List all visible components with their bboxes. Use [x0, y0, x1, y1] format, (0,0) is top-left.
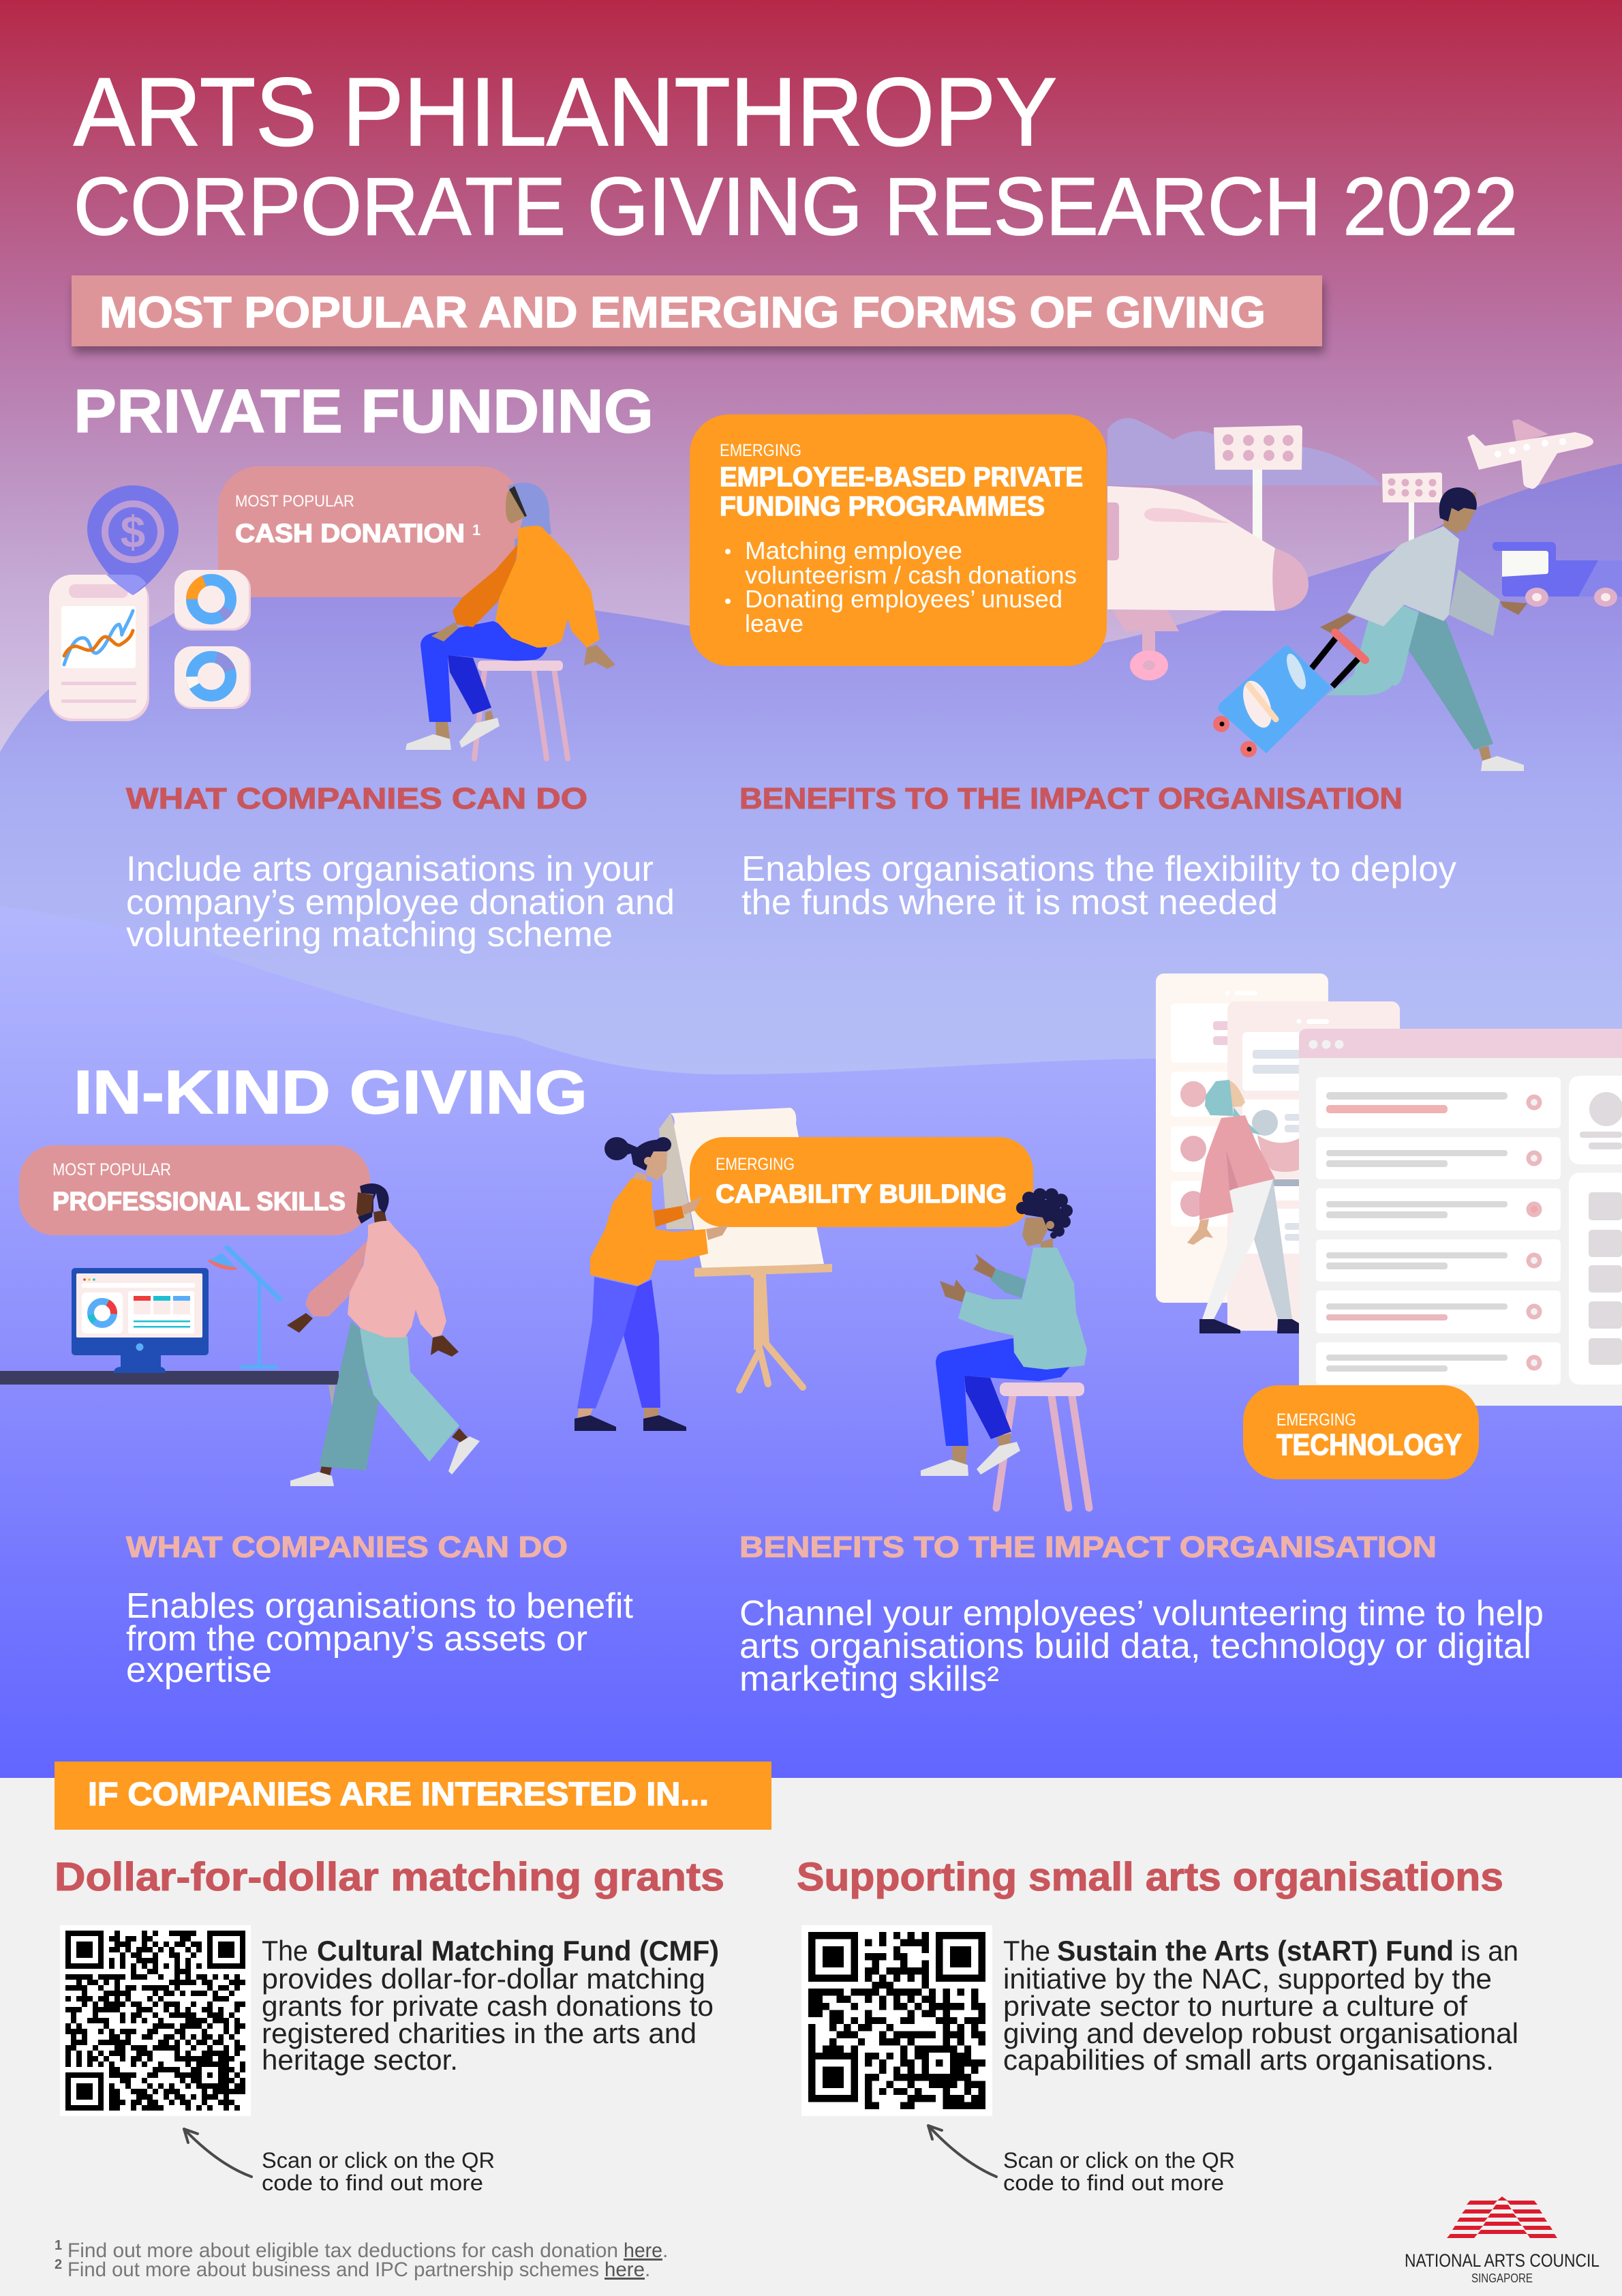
note: scan left	[262, 2148, 495, 2195]
orange box: employee-based programmes: Donating employees’ unused	[745, 585, 1062, 613]
pill: technology: TECHNOLOGY	[1276, 1428, 1462, 1462]
logo: national arts council: SINGAPORE	[1471, 2271, 1533, 2285]
section two columns: what companies can do	[126, 1530, 634, 1690]
note: scan left: code to find out more	[262, 2171, 483, 2195]
section two columns: benefits: BENEFITS TO THE IMPACT ORGANISATION	[739, 1530, 1437, 1564]
text: sustain the arts fund: The	[1003, 1935, 1050, 1967]
orange box: employee-based programmes: Matching employee	[745, 537, 962, 564]
illustration: back app screen	[1156, 973, 1328, 1303]
note: scan right	[1003, 2148, 1235, 2195]
illustration: woman looking at screens	[1187, 1080, 1299, 1333]
logo: national arts council	[1405, 2196, 1600, 2285]
section one columns: what companies can do: Include arts organisations in your	[126, 849, 654, 889]
section two columns: what companies can do: WHAT COMPANIES CAN DO	[126, 1530, 568, 1564]
section one columns: benefits: the funds where it is most needed	[741, 883, 1278, 922]
footnotes: Find out more about business and IPC partnership schemes	[67, 2259, 599, 2281]
icon: donut tile one	[174, 570, 251, 631]
footnotes: 2	[55, 2257, 62, 2272]
airport backdrop: cloud and signs	[1107, 418, 1442, 547]
section two columns: benefits: marketing skills²	[739, 1659, 999, 1699]
section one columns: what companies can do	[126, 782, 675, 954]
banner: most popular and emerging	[72, 275, 1322, 346]
illustration: man seated with curly hair	[921, 1188, 1089, 1508]
pill: cash donation: MOST POPULAR	[235, 492, 354, 511]
text: sustain the arts fund: giving and develop robust organisational	[1003, 2017, 1518, 2049]
illustration: desk with monitor and lamp	[0, 1246, 339, 1385]
text: sustain the arts fund: is an	[1460, 1935, 1518, 1967]
pill: professional skills: MOST POPULAR	[52, 1160, 171, 1179]
pill: cash donation: 1	[472, 522, 480, 539]
illustration: woman seated on stool	[406, 483, 615, 759]
title: CORPORATE GIVING RESEARCH 2022	[74, 161, 1518, 252]
note: scan left: Scan or click on the QR	[262, 2148, 495, 2173]
footnotes: here	[624, 2239, 662, 2262]
text: sustain the arts fund	[1003, 1935, 1518, 2076]
orange box: employee-based programmes: leave	[745, 609, 804, 637]
section two columns: benefits: arts organisations build data, technology or digital	[739, 1627, 1531, 1666]
section one columns: what companies can do: company’s employee donation and	[126, 883, 675, 922]
QR code: sustain the arts fund	[801, 1925, 992, 2116]
arrow: to left QR code	[184, 2129, 251, 2177]
section one columns: what companies can do: WHAT COMPANIES CAN DO	[126, 782, 587, 815]
heading: supporting small arts organisations: Supporting small arts organisations	[797, 1855, 1503, 1899]
illustration: woman presenting	[575, 1137, 729, 1431]
pill: professional skills: PROFESSIONAL SKILLS	[52, 1188, 346, 1216]
footnotes	[55, 2238, 668, 2281]
pill: capability building: EMERGING	[716, 1155, 795, 1174]
icon: phone with chart and location pin	[49, 485, 179, 721]
pill: professional skills	[19, 1145, 370, 1235]
plane on the ground	[1107, 486, 1309, 680]
section two columns: benefits: Channel your employees’ volunteering time to help	[739, 1594, 1544, 1633]
section one columns: benefits: Enables organisations the flexibility to deploy	[741, 849, 1456, 889]
pill: cash donation: CASH DONATION	[235, 519, 465, 548]
illustration: flip chart easel	[659, 1108, 832, 1390]
text: sustain the arts fund: capabilities of small arts organisations.	[1003, 2044, 1494, 2076]
icon: phone with chart and location pin: $	[121, 507, 145, 557]
text: cultural matching fund: registered charities in the arts and	[262, 2017, 697, 2049]
pill: technology: EMERGING	[1276, 1410, 1356, 1430]
footnotes: .	[645, 2259, 650, 2281]
orange box: employee-based programmes: EMPLOYEE-BASED PRIVATE	[720, 462, 1083, 492]
orange box: employee-based programmes: FUNDING PROGRAMMES	[720, 492, 1045, 522]
text: cultural matching fund	[262, 1935, 719, 2076]
orange box: employee-based programmes: volunteerism / cash donations	[745, 561, 1077, 589]
section two columns: what companies can do: expertise	[126, 1650, 272, 1690]
icon: donut tile two	[174, 646, 251, 709]
heading: dollar-for-dollar matching grants: Dollar-for-dollar matching grants	[55, 1855, 724, 1899]
title: ARTS PHILANTHROPY	[74, 58, 1057, 166]
footnotes: Find out more about eligible tax deductions for cash donation	[67, 2239, 618, 2262]
title	[74, 58, 1518, 252]
text: cultural matching fund: provides dollar-for-dollar matching	[262, 1963, 705, 1995]
arrow: to right QR code	[928, 2126, 996, 2177]
text: cultural matching fund: Cultural Matching Fund (CMF)	[317, 1935, 719, 1967]
pill: capability building: CAPABILITY BUILDING	[716, 1180, 1007, 1209]
illustration: man with suitcase	[1213, 487, 1527, 771]
pill: technology	[1243, 1385, 1479, 1479]
footnotes: 1	[55, 2238, 62, 2253]
text: sustain the arts fund: initiative by the NAC, supported by the	[1003, 1963, 1492, 1995]
note: scan right: code to find out more	[1003, 2171, 1224, 2195]
heading: private funding: PRIVATE FUNDING	[74, 378, 654, 446]
section one columns: benefits: BENEFITS TO THE IMPACT ORGANISATION	[739, 782, 1403, 815]
illustration: man walking	[287, 1183, 480, 1486]
banner: if companies are interested: IF COMPANIES ARE INTERESTED IN...	[88, 1777, 709, 1813]
text: cultural matching fund: The	[262, 1935, 308, 1967]
note: scan right: Scan or click on the QR	[1003, 2148, 1235, 2173]
heading: in-kind giving: IN-KIND GIVING	[74, 1059, 587, 1127]
hills	[0, 464, 1622, 787]
pill: cash donation	[218, 466, 521, 630]
text: cultural matching fund: heritage sector.	[262, 2044, 458, 2076]
text: cultural matching fund: grants for private cash donations to	[262, 1990, 714, 2022]
banner: if companies are interested	[55, 1762, 771, 1830]
text: sustain the arts fund: Sustain the Arts (stART) Fund	[1057, 1935, 1454, 1967]
section two columns: what companies can do: from the company’s assets or	[126, 1619, 587, 1659]
orange box: employee-based programmes: EMERGING	[720, 441, 801, 460]
icon: truck	[1493, 542, 1622, 607]
illustration: middle app screen	[1227, 1001, 1400, 1331]
text: sustain the arts fund: private sector to nurture a culture of	[1003, 1990, 1467, 2022]
section two columns: what companies can do: Enables organisations to benefit	[126, 1586, 634, 1626]
section one columns: benefits	[739, 782, 1456, 922]
section one columns: what companies can do: volunteering matching scheme	[126, 915, 613, 954]
QR code: cultural matching fund	[60, 1925, 251, 2116]
section two columns: benefits	[739, 1530, 1544, 1699]
orange box: employee-based programmes	[690, 414, 1107, 666]
banner: most popular and emerging: MOST POPULAR AND EMERGING FORMS OF GIVING	[100, 288, 1266, 337]
icon: flying plane	[1467, 419, 1593, 489]
footnotes: here	[605, 2259, 645, 2281]
footnotes: .	[662, 2239, 668, 2262]
illustration: front dashboard window	[1299, 1029, 1622, 1406]
pill: capability building	[690, 1137, 1033, 1227]
